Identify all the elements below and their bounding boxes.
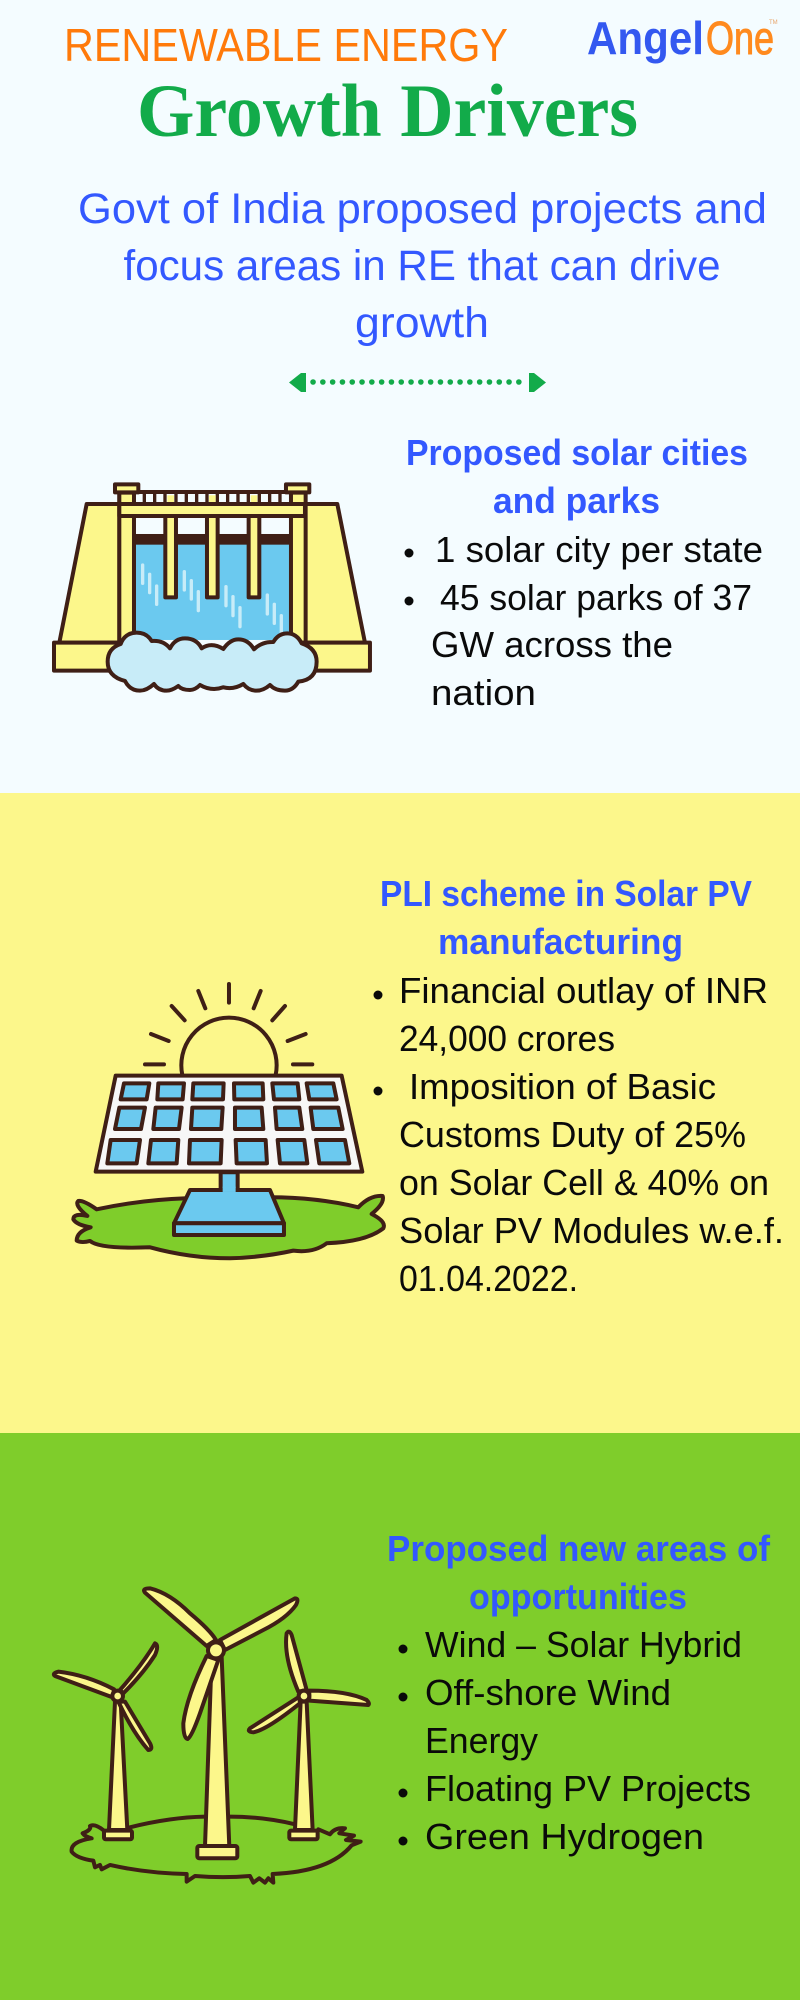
text: PLI scheme: Financial outlay of INR [399, 970, 768, 1011]
text: proposed new areas: Wind – Solar Hybrid [425, 1624, 742, 1665]
logo: Angel One: One [706, 12, 774, 64]
text: proposed new areas: Proposed new areas of [387, 1528, 771, 1569]
text: proposed solar cities: 1 solar city per state [435, 529, 763, 570]
panel: new areas of opportunities [0, 1433, 800, 2000]
logo: Angel One: Angel [587, 12, 704, 64]
text: PLI scheme: Solar PV Modules w.e.f. [399, 1210, 784, 1251]
icon: solar panel [73, 984, 384, 1258]
icon: hydro dam [54, 484, 370, 691]
icon: wind turbines [54, 1588, 369, 1883]
logo: Angel One [587, 12, 778, 64]
title: growth drivers: Growth Drivers [137, 70, 638, 153]
text: PLI scheme [374, 873, 784, 1299]
logo: Angel One: TM [769, 20, 778, 26]
panel: PLI scheme [0, 793, 800, 1433]
text: proposed solar cities: 45 solar parks of 37 [440, 577, 752, 618]
text: proposed new areas: Floating PV Projects [425, 1768, 751, 1809]
text: proposed solar cities: GW across the [431, 624, 673, 665]
text: proposed new areas: Off-shore Wind [425, 1672, 671, 1713]
text: PLI scheme: manufacturing [438, 921, 683, 962]
panel: header and solar cities [0, 0, 800, 793]
text: proposed new areas: Green Hydrogen [425, 1816, 704, 1857]
text: PLI scheme: Imposition of Basic [409, 1066, 716, 1107]
text: PLI scheme: on Solar Cell & 40% on [399, 1162, 769, 1203]
text: proposed solar cities: nation [431, 672, 536, 713]
text: PLI scheme: PLI scheme in Solar PV [380, 873, 752, 914]
text: PLI scheme: 01.04.2022. [399, 1258, 578, 1299]
text: proposed new areas [387, 1528, 771, 1857]
text: proposed new areas: opportunities [469, 1576, 687, 1617]
text: PLI scheme: Customs Duty of 25% [399, 1114, 746, 1155]
subtitle: Govt of India proposed projects and [78, 185, 767, 233]
text: proposed solar cities: Proposed solar cities [406, 432, 748, 473]
heading: renewable energy: RENEWABLE ENERGY [64, 19, 508, 71]
text: PLI scheme: 24,000 crores [399, 1018, 615, 1059]
subtitle: focus areas in RE that can drive [124, 242, 720, 290]
subtitle: growth [355, 299, 489, 347]
text: proposed solar cities: and parks [493, 480, 660, 521]
text: proposed new areas: Energy [425, 1720, 538, 1761]
text: proposed solar cities [404, 432, 763, 713]
subtitle [78, 185, 767, 347]
arrow: double-headed dotted [289, 373, 546, 392]
